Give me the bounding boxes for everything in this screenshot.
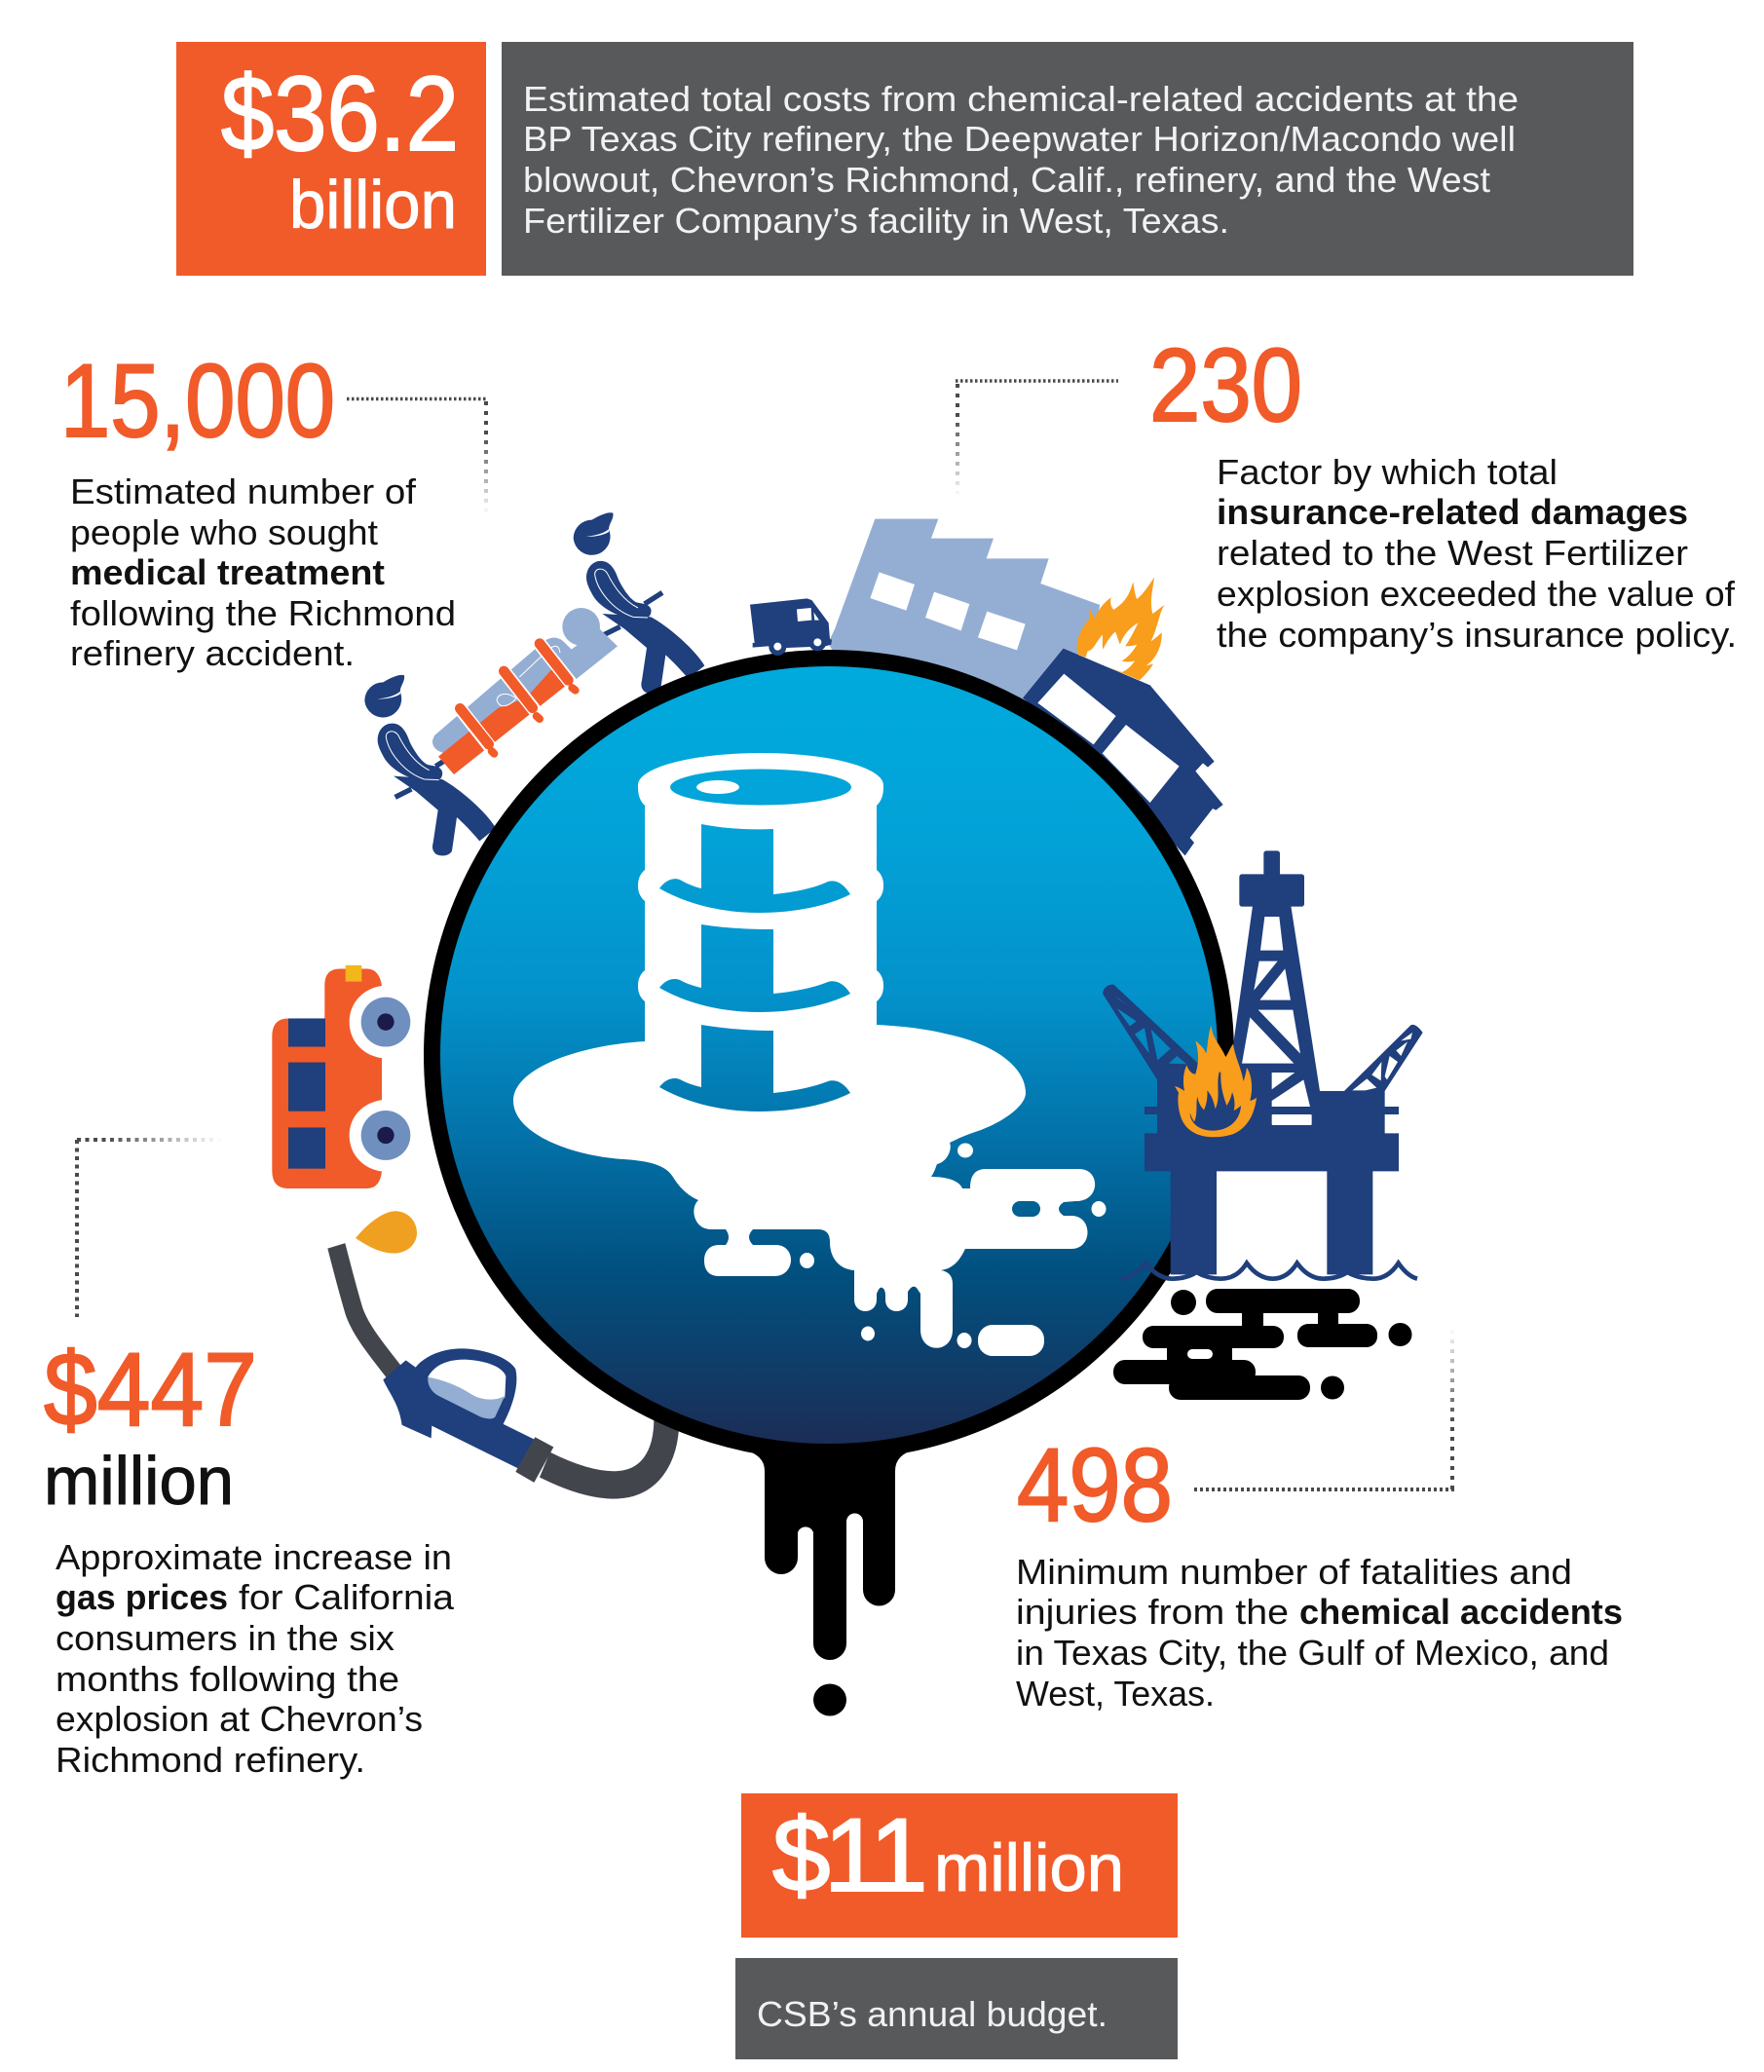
stat text: gas prices: explosion at Chevron’s [56, 1699, 423, 1739]
icon: delivery truck [750, 598, 832, 656]
stat text: gas prices: consumers in the six [56, 1618, 394, 1658]
icon: front stretcher carrier [574, 512, 704, 694]
stat number: $447 million: million [44, 1443, 234, 1519]
central globe with drips [424, 650, 1234, 1716]
stat text: chemical accidents [1016, 1552, 1623, 1714]
stat text: insurance damages: the company’s insurance policy. [1217, 615, 1737, 655]
icon: building fire [1077, 578, 1165, 680]
headline description panel: BP Texas City refinery, the Deepwater Horizon/Macondo well [523, 119, 1516, 159]
stat number: $447 million: $447 [44, 1331, 257, 1448]
budget description panel: CSB’s annual budget. [757, 1994, 1107, 2034]
stat text: medical treatment: medical treatment [70, 552, 385, 592]
oil drips [726, 1437, 935, 1716]
stat number: $447 million [44, 1331, 257, 1519]
stat text: gas prices: months following the [56, 1659, 399, 1699]
stat text: medical treatment: people who sought [70, 512, 378, 552]
headline description panel [502, 42, 1633, 276]
stat text: gas prices: gas prices [56, 1577, 228, 1617]
stat text: insurance damages: Factor by which total [1217, 452, 1558, 492]
oil spill [513, 1025, 1107, 1356]
stat text: insurance damages: insurance-related damages [1217, 492, 1688, 532]
stat text: gas prices: Approximate increase in [56, 1537, 452, 1577]
stat text: medical treatment [70, 471, 456, 673]
stat text: insurance damages: explosion exceeded the value of [1217, 574, 1736, 614]
stat text: gas prices [56, 1537, 455, 1780]
icon: offshore oil rig [1103, 850, 1423, 1279]
stat text: chemical accidents: chemical accidents [1299, 1592, 1623, 1632]
headline description panel: Fertilizer Company’s facility in West, Texas. [523, 201, 1229, 241]
stat number: 230: 230 [1149, 326, 1302, 443]
stat text: gas prices: Richmond refinery. [56, 1740, 365, 1780]
icon: factory [828, 519, 1100, 704]
icon: oil slick on water [1113, 1289, 1412, 1400]
icon: fuel pump nozzle and hose [336, 1246, 666, 1485]
icon: damaged building [1023, 649, 1223, 855]
stat text: chemical accidents: injuries from the [1016, 1592, 1289, 1632]
headline number: $36.2 [221, 55, 459, 173]
stat text: chemical accidents: West, Texas. [1016, 1674, 1215, 1714]
stat text: insurance damages [1217, 452, 1737, 655]
icon: fuel drop [356, 1211, 417, 1254]
stat number: 15,000: 15,000 [60, 342, 335, 459]
headline description panel: Estimated total costs from chemical-related accidents at the [523, 79, 1519, 119]
stat text: medical treatment: following the Richmond [70, 593, 456, 633]
icon: rig fire [1175, 1026, 1257, 1137]
budget stat box: $11 million: million [934, 1830, 1124, 1905]
budget stat box: $11 million [741, 1793, 1178, 1938]
stat text: chemical accidents: in Texas City, the Gulf of Mexico, and [1016, 1633, 1609, 1673]
icon: patient on stretcher [432, 608, 618, 774]
icon: rear stretcher carrier [364, 675, 496, 855]
stat text: medical treatment: Estimated number of [70, 471, 417, 511]
icon: fuel can [272, 965, 410, 1188]
stat number: 498: 498 [1017, 1426, 1173, 1543]
stat text: gas prices: for California [239, 1577, 455, 1617]
budget description panel [735, 1958, 1178, 2059]
headline stat box: $36.2 billion [176, 42, 486, 276]
headline unit: billion [289, 167, 457, 243]
stat text: chemical accidents: Minimum number of fatalities and [1016, 1552, 1572, 1592]
stat text: insurance damages: related to the West Fertilizer [1217, 533, 1688, 573]
budget stat box: $11 million: $11 [772, 1796, 928, 1913]
headline description panel: blowout, Chevron’s Richmond, Calif., refinery, and the West [523, 160, 1490, 200]
oil barrel [638, 753, 883, 1072]
stat text: medical treatment: refinery accident. [70, 633, 355, 673]
